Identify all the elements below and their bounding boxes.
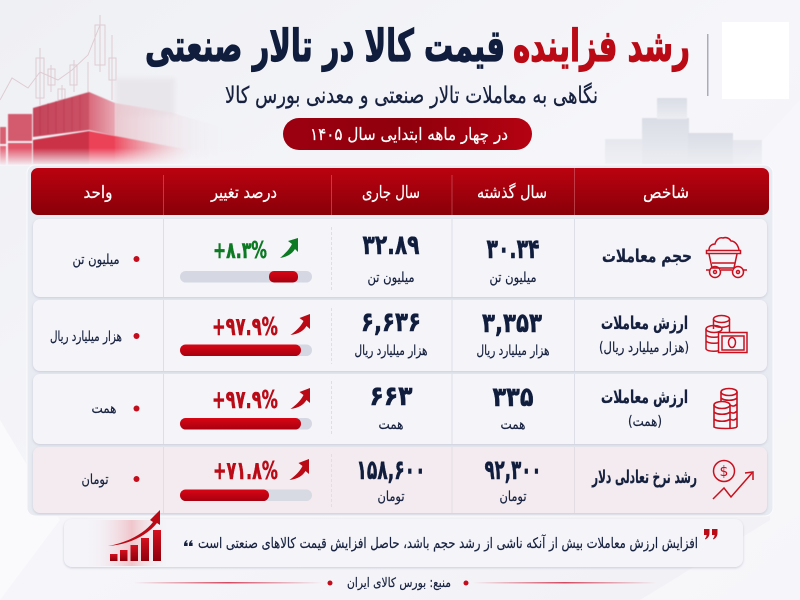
icon: red arrow	[290, 388, 310, 409]
row: trade value, billion rial: ۶,۶۳۶	[361, 307, 421, 338]
row: trade value, hemat: همت	[378, 417, 404, 433]
row: dollar equilibrium rate: تومان	[500, 489, 527, 505]
table backing panel	[27, 165, 773, 516]
period pill: در چهار ماهه ابتدایی سال ۱۴۰۵	[310, 125, 508, 145]
row: dollar equilibrium rate: تومان	[378, 489, 405, 505]
icon: red arrow	[290, 459, 309, 480]
row: trade value, billion rial: +۹۷.۹%	[212, 312, 278, 341]
row: trade value, hemat: ارزش معاملات	[601, 387, 688, 408]
period pill	[283, 118, 532, 150]
row: dollar equilibrium rate	[33, 447, 767, 513]
logo placeholder	[722, 22, 789, 99]
row: trade value, hemat: ۳۳۵	[492, 382, 534, 413]
progress bar	[180, 344, 312, 356]
icon: closing quote mark	[184, 540, 193, 546]
row: trade volume: میلیون تن	[368, 270, 414, 286]
row: trade value, hemat: +۹۷.۹%	[212, 385, 278, 414]
row: trade volume: ۳۲.۸۹	[362, 230, 420, 261]
icon: dollar growth	[713, 460, 753, 499]
icon: coin stack	[714, 388, 737, 428]
icon: growth bars and arrow	[108, 510, 161, 561]
header: indicator: شاخص	[643, 183, 689, 203]
illustration: factory silhouettes	[605, 98, 762, 164]
icon: ore cart	[706, 238, 747, 278]
row: trade volume: حجم معاملات	[602, 246, 692, 267]
icon: red arrow	[290, 314, 310, 335]
header: last year: سال گذشته	[477, 182, 547, 203]
title: رشد فزاینده	[513, 21, 690, 72]
title: قیمت کالا در تالار صنعتی	[145, 21, 505, 72]
row: dollar equilibrium rate: رشد نرخ تعادلی دلار	[591, 467, 697, 488]
logo divider	[707, 34, 708, 96]
row: trade volume: ۳۰.۳۴	[486, 234, 540, 265]
row: dollar equilibrium rate: ۱۵۸,۶۰۰	[356, 455, 426, 486]
progress bar	[180, 418, 312, 430]
row: trade value, hemat	[33, 374, 767, 444]
row: dollar equilibrium rate: ۹۲,۳۰۰	[484, 455, 542, 486]
row: trade value, hemat: همت	[500, 417, 526, 433]
subtitle: نگاهی به معاملات تالار صنعتی و معدنی بورس کالا	[225, 82, 598, 109]
icon: green arrow	[280, 238, 298, 258]
header: current year: سال جاری	[362, 183, 420, 203]
row: trade value, billion rial: هزار میلیارد ریال	[50, 329, 122, 345]
row: dollar equilibrium rate: تومان	[82, 472, 109, 488]
row: trade value, hemat: همت	[92, 401, 116, 417]
source: منبع: بورس کالای ایران	[347, 576, 451, 591]
illustration: containers and market chart	[0, 15, 240, 166]
row: trade value, hemat: ۶۶۳	[370, 381, 413, 412]
icon: coins and banknote	[706, 316, 747, 352]
row: trade value, billion rial: ۳,۳۵۳	[482, 308, 542, 339]
table header	[31, 168, 769, 215]
icon: quote mark	[704, 529, 718, 540]
icon: dollar growth: $	[720, 464, 728, 480]
header: change percent: درصد تغییر	[210, 183, 277, 203]
row: trade volume: میلیون تن	[490, 270, 536, 286]
row: dollar equilibrium rate: +۷۱.۸%	[213, 456, 278, 485]
row: trade value, billion rial: هزار میلیارد ریال	[354, 343, 428, 359]
row: trade value, billion rial	[33, 300, 767, 371]
source	[133, 576, 657, 591]
header: unit: واحد	[84, 183, 112, 203]
progress bar	[180, 271, 312, 282]
row: trade value, billion rial: ارزش معاملات	[601, 313, 688, 334]
row: trade volume: +۸.۳%	[213, 238, 267, 264]
row: trade value, billion rial: (هزار میلیارد ریال)	[599, 340, 689, 356]
callout	[64, 510, 743, 567]
row: trade volume: میلیون تن	[72, 252, 120, 268]
row: trade volume	[33, 219, 767, 297]
row: trade value, hemat: (همت)	[628, 414, 662, 430]
progress bar	[180, 490, 312, 501]
row: trade value, billion rial: هزار میلیارد ریال	[476, 343, 550, 359]
